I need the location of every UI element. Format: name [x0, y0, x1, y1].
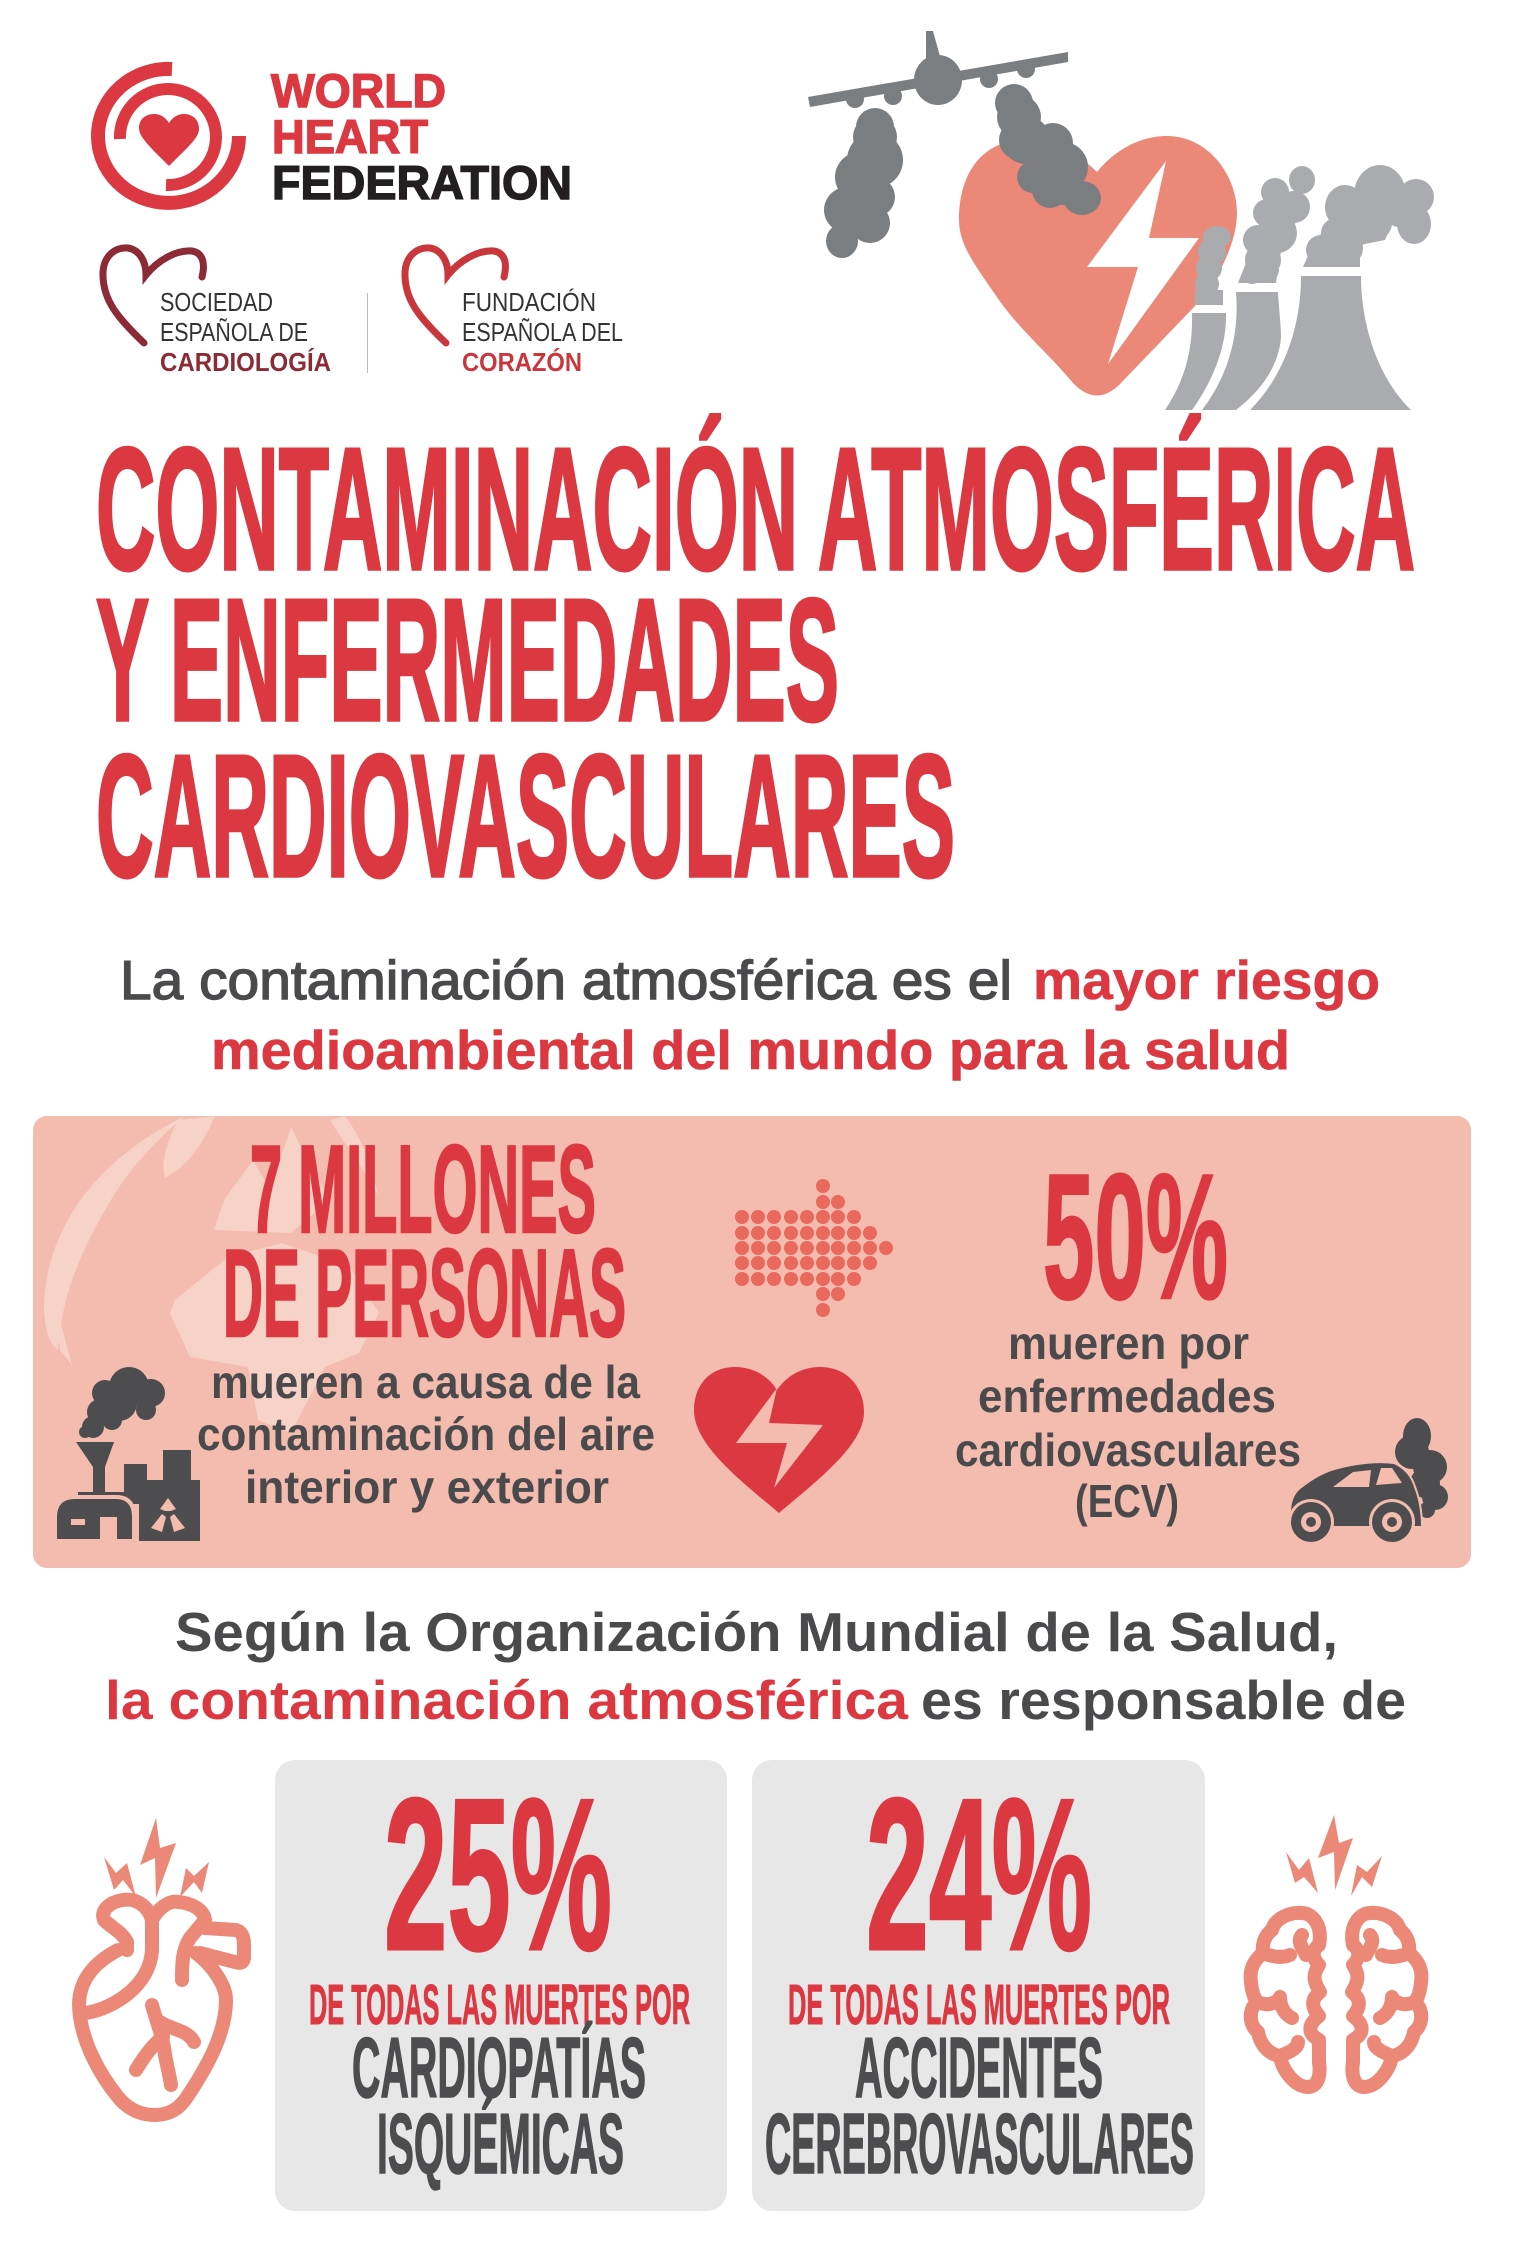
- logo: Sociedad Española de Cardiología: CARDIOLOGÍA: [160, 347, 331, 377]
- plane smoke right: [995, 84, 1101, 215]
- logo: Sociedad Española de Cardiología: SOCIEDAD: [160, 287, 273, 317]
- text: cardiovascular deaths: cardiovasculares: [955, 1424, 1301, 1476]
- panel: 25% ischemic heart disease: ISQUÉMICAS: [377, 2097, 624, 2192]
- stat: 50%: 50%: [1043, 1137, 1228, 1336]
- stat: 24%: 24%: [866, 1753, 1092, 1995]
- subheading: according to WHO: la contaminación atmosférica: [105, 1669, 908, 1731]
- icon: white bolt: [1087, 161, 1199, 364]
- label: accidentes cerebrovasculares: ACCIDENTES: [855, 2021, 1103, 2116]
- text: causes: mueren a causa de la: [211, 1356, 640, 1408]
- icon: salmon heart: [959, 136, 1237, 396]
- panel: 25% ischemic heart disease: [275, 1753, 727, 2211]
- icon: dotted arrow: [735, 1179, 893, 1317]
- panel: 24% strokes: [752, 1753, 1205, 2211]
- icon: concentric rings with heart: [98, 69, 239, 203]
- logo: Fundación Española del Corazón: CORAZÓN: [462, 347, 582, 377]
- logo text: HEART: [272, 110, 428, 163]
- text: cardiovascular deaths: mueren por: [1008, 1317, 1249, 1369]
- icon: broken heart with bolt: [694, 1367, 864, 1513]
- icon: cooling towers: [1165, 165, 1434, 410]
- logo text: WORLD: [271, 64, 446, 117]
- logo text: [271, 64, 572, 209]
- subheading: greatest environmental risk: medioambiental del mundo para la salud: [211, 1019, 1290, 1081]
- text: cardiovascular deaths: [955, 1317, 1301, 1527]
- icon: globe background: [44, 1116, 379, 1433]
- logo: Sociedad Española de Cardiología: [103, 248, 331, 377]
- subheading: according to WHO: [105, 1601, 1406, 1731]
- stat: 7 millones de personas: [223, 1121, 626, 1363]
- label: cardiopatías isquémicas: [352, 2021, 646, 2192]
- label: accidentes cerebrovasculares: [765, 2021, 1194, 2192]
- subheading: greatest environmental risk: La contaminación atmosférica es el: [120, 949, 1012, 1011]
- text: DE TODAS LAS MUERTES POR: [309, 1973, 690, 2037]
- text: causes: contaminación del aire: [197, 1408, 655, 1460]
- logo: Fundación Española del Corazón: FUNDACIÓN: [462, 287, 596, 317]
- plane smoke left: [824, 108, 903, 258]
- smoke: large tower: [1303, 165, 1434, 267]
- icon: anatomical heart with bolts: [79, 1818, 244, 2115]
- text: cardiovascular deaths: enfermedades: [978, 1370, 1276, 1422]
- text: cardiovascular deaths: (ECV): [1075, 1475, 1179, 1527]
- logo: World Heart Federation: [98, 64, 572, 209]
- subheading: greatest environmental risk: mayor riesgo: [1033, 949, 1380, 1011]
- panel: 25% ischemic heart disease: CARDIOPATÍAS: [352, 2021, 646, 2116]
- icon: airplane: [808, 31, 1068, 108]
- panel: seven million deaths: DE PERSONAS: [223, 1225, 626, 1363]
- logo: Fundación Española del Corazón: ESPAÑOLA DEL: [462, 317, 623, 347]
- title: [96, 411, 1415, 913]
- logo: Sociedad Española de Cardiología: ESPAÑOLA DE: [160, 317, 308, 347]
- subheading: according to WHO: es responsable de: [921, 1669, 1406, 1731]
- icon: car with exhaust smoke: [1288, 1418, 1448, 1545]
- subheading: greatest environmental risk: [120, 949, 1380, 1081]
- icon: brain with bolts: [1251, 1815, 1421, 2087]
- text: causes: [197, 1356, 655, 1513]
- subheading: according to WHO: Según la Organización Mundial de la Salud,: [175, 1601, 1338, 1663]
- stat: 7 millones de personas: 7 MILLONES: [250, 1121, 596, 1259]
- logo: Fundación Española del Corazón: [405, 248, 623, 377]
- smoke: small tower: [1195, 226, 1231, 305]
- logo text: FEDERATION: [272, 156, 572, 209]
- illustration: heart with lightning bolt, plane and cooling towers: [808, 31, 1434, 410]
- text: causes: interior y exterior: [245, 1461, 609, 1513]
- stat: 25%: 25%: [384, 1753, 612, 1995]
- panel: seven million deaths: [33, 1116, 1471, 1568]
- icon: factory with smoke: [55, 1367, 200, 1543]
- smoke: middle tower: [1238, 166, 1315, 284]
